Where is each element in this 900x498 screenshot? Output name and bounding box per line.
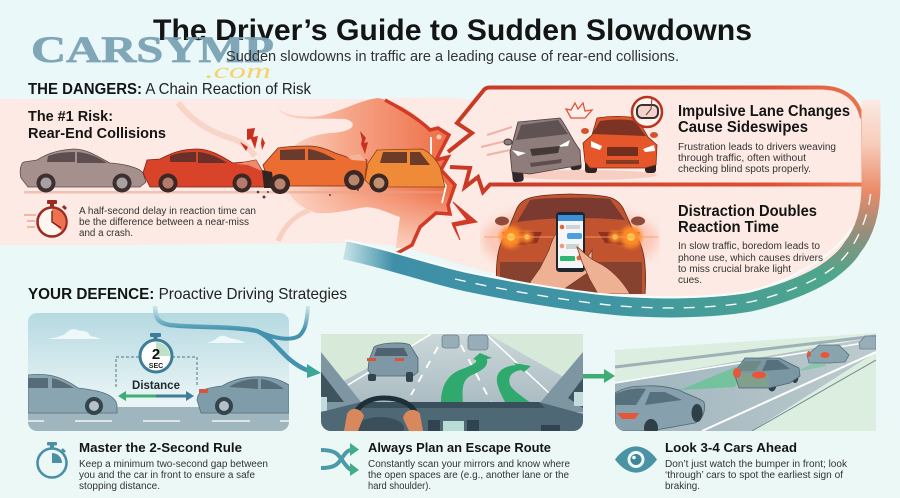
icon: 2 sec stopwatch: [140, 333, 172, 372]
icon: teal stopwatch: [38, 442, 66, 478]
windscreen pillars and dashboard: [321, 352, 583, 431]
right panels frame with jagged impact edge: [448, 88, 863, 192]
car: orange hatchback: [365, 149, 445, 192]
car: grey sedan: [20, 149, 146, 192]
text: look 3-4 cars ahead: braking.: [665, 481, 700, 492]
panel: dangers background band: [0, 87, 864, 297]
arrow: green escape lane two: [497, 363, 532, 404]
text: master the 2-second rule: Keep a minimum two-second gap between: [79, 459, 268, 470]
text: master the 2-second rule: stopping distance.: [79, 481, 160, 492]
text: impulsive lane changes: through traffic, often without: [678, 153, 806, 164]
icon: cracked mirror: [632, 97, 662, 127]
text: distraction: to miss crucial brake light: [678, 264, 791, 275]
car: grey front view: [504, 118, 582, 182]
distance arrows: [118, 391, 194, 401]
panel: escape route illustration: [321, 334, 583, 439]
text: look 3-4 cars ahead: Look 3-4 Cars Ahead: [665, 441, 797, 455]
icon: red stopwatch: [24, 200, 66, 236]
text: master the 2-second rule: Master the 2-Second Rule: [79, 441, 242, 455]
text: distraction: Reaction Time: [678, 219, 779, 236]
subtitle: Sudden slowdowns in traffic are a leading cause of rear-end collisions.: [226, 48, 679, 65]
phone: [556, 212, 585, 272]
text: distraction: phone use, which causes drivers: [678, 253, 823, 264]
text: half-second delay: be the difference between a near-miss: [79, 217, 249, 228]
text: look 3-4 cars ahead: Don’t just watch the bumper in front; look: [665, 459, 847, 470]
text: always plan an escape route: the open spaces are (e.g., another lane or the: [368, 470, 569, 481]
text: impulsive lane changes: Cause Sideswipes: [678, 119, 808, 136]
icon: impact sparks: [240, 128, 368, 154]
icon: 2 sec stopwatch: 2: [152, 346, 160, 363]
text: always plan an escape route: Constantly scan your mirrors and know where: [368, 459, 571, 470]
heading: the dangers: THE DANGERS: A Chain Reaction of Risk: [28, 81, 312, 98]
cars in the distance: [442, 335, 488, 350]
watermark logo: [31, 30, 274, 83]
text: distraction: Distraction Doubles: [678, 203, 817, 220]
arrow: green escape lane one: [441, 353, 492, 403]
panel: two-second rule illustration: [28, 313, 290, 431]
text: impulsive lane changes: checking blind spots properly.: [678, 164, 811, 175]
car: rear view: [495, 194, 646, 295]
text: master the 2-second rule: [79, 441, 268, 492]
left hand: [530, 232, 592, 292]
icon: shuffle arrows: [321, 443, 359, 476]
green sight cone: [680, 366, 739, 390]
car: distant car: [859, 336, 876, 349]
road ribbon: [345, 100, 871, 308]
car: orange SUV: [262, 146, 367, 194]
text: look 3-4 cars ahead: ‘through’ cars to spot the earliest sign of: [665, 470, 843, 481]
impact burst outline: [385, 100, 455, 256]
car: driver's car: [615, 386, 705, 437]
text: master the 2-second rule: you and the car in front to ensure a safe: [79, 470, 256, 481]
heading: the #1 risk: Rear-End Collisions: [28, 126, 166, 142]
heading: your defence: YOUR DEFENCE: Proactive Driving Strategies: [28, 286, 347, 303]
icon: eye: [615, 446, 657, 473]
dashed distance bracket: [116, 357, 197, 387]
text: distraction: cues.: [678, 275, 702, 286]
icon: impact star: [566, 103, 592, 118]
debris: [257, 189, 359, 198]
steering wheel and hands: [344, 396, 423, 431]
watermark logo: CARSYMP: [31, 30, 274, 71]
car: far car: [807, 345, 849, 363]
collision: chain of four cars: [20, 128, 445, 198]
car: front car left: [28, 374, 117, 415]
car: lead car: [367, 343, 418, 382]
text: impulsive lane changes: [678, 103, 850, 175]
text: always plan an escape route: [368, 441, 571, 492]
right hand: [577, 247, 630, 294]
car: middle car with brake lights: [733, 358, 800, 392]
text: always plan an escape route: hard shoulder).: [368, 481, 431, 492]
arrow: flow from strategies to escape route: [155, 306, 321, 378]
brake lights: [484, 226, 658, 248]
car: orange front view: [581, 116, 658, 173]
explosion shockwave blob: [277, 98, 455, 248]
text: half-second delay: A half-second delay in reaction time can: [79, 206, 256, 217]
title: The Driver’s Guide to Sudden Slowdowns: [153, 14, 752, 47]
text: distraction: In slow traffic, boredom leads to: [678, 241, 821, 252]
text: half-second delay: and a crash.: [79, 228, 133, 239]
heading: the #1 risk: The #1 Risk:: [28, 109, 113, 125]
text: impulsive lane changes: Impulsive Lane Changes: [678, 103, 850, 120]
car: rear car right: [197, 377, 289, 415]
text: half-second delay: [79, 206, 256, 239]
watermark logo: .com: [205, 58, 271, 83]
lower impact bolt: [452, 202, 477, 240]
text: always plan an escape route: Always Plan an Escape Route: [368, 441, 551, 455]
arrow: escape route to look ahead: [583, 369, 615, 383]
car: red sedan: [143, 149, 265, 192]
text: look 3-4 cars ahead: [665, 441, 847, 492]
illustration: phone distraction with braking car: [482, 194, 658, 295]
text: distraction: [678, 203, 823, 286]
illustration: sideswipe cars: [481, 97, 662, 182]
label: distance: Distance: [132, 380, 180, 392]
panel: look ahead illustration: [615, 333, 876, 437]
text: impulsive lane changes: Frustration leads to drivers weaving: [678, 142, 836, 153]
heading: the #1 risk: [28, 109, 166, 142]
icon: 2 sec stopwatch: SEC: [149, 363, 163, 370]
